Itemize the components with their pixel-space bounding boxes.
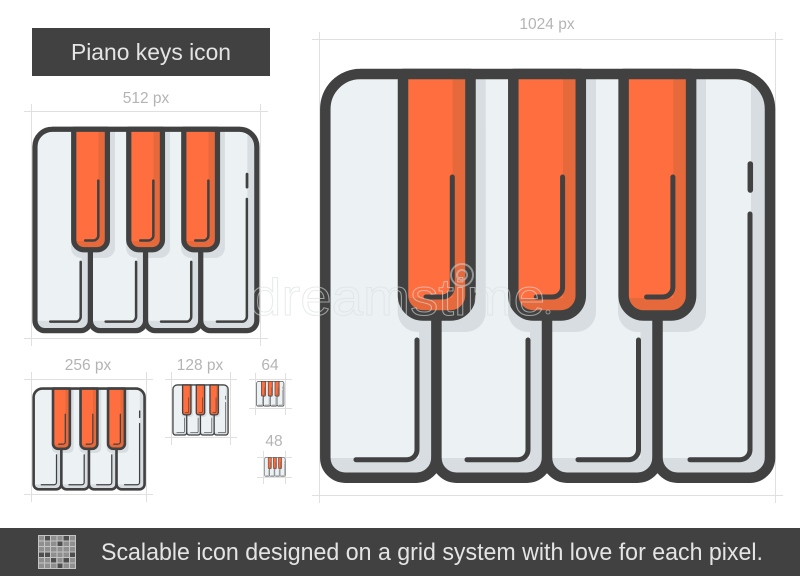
watermark: dreamstime xyxy=(250,269,545,327)
footer bar xyxy=(0,528,800,576)
title banner: Piano keys icon xyxy=(71,39,231,65)
piano icon 256 px xyxy=(24,357,153,502)
piano icon 64 px xyxy=(249,357,292,415)
size label: 256 px: 256 px xyxy=(65,357,112,374)
icon: pixel grid xyxy=(38,535,76,569)
size label: 64: 64 xyxy=(261,357,279,374)
size label: 128 px: 128 px xyxy=(177,357,224,374)
size label: 1024 px: 1024 px xyxy=(519,16,575,33)
piano icon 512 px xyxy=(24,90,268,346)
footer text: Scalable icon designed on a grid system with love for each pixel. xyxy=(101,539,763,566)
piano icon 128 px xyxy=(165,357,237,445)
size label: 48: 48 xyxy=(265,433,283,450)
size label: 512 px: 512 px xyxy=(123,90,170,107)
piano icon 48 px xyxy=(257,433,292,484)
title banner xyxy=(32,28,270,76)
